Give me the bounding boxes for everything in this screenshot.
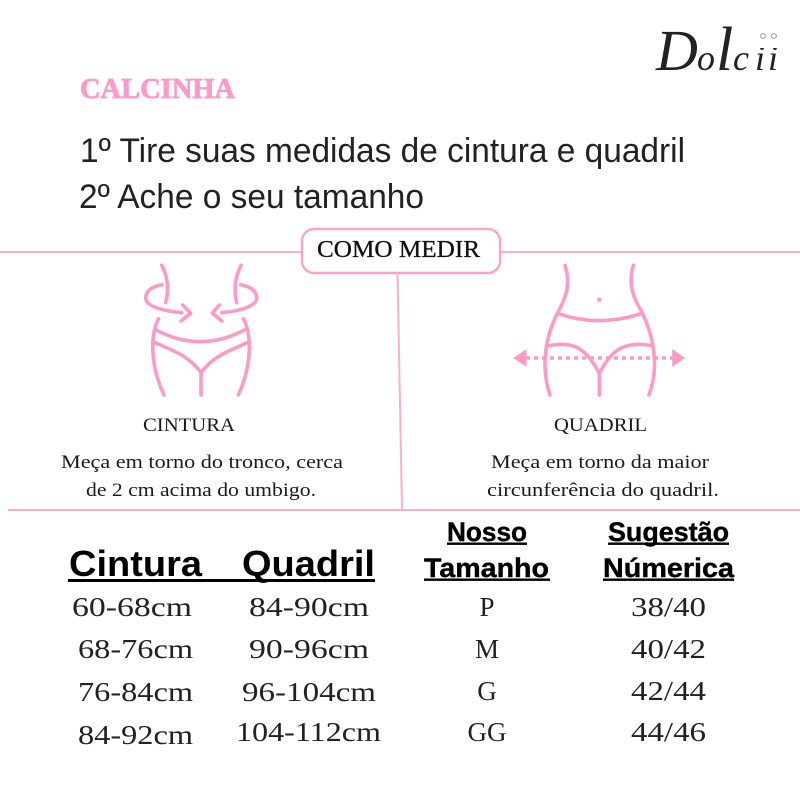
column: size values: G	[477, 676, 497, 706]
logo: Dolcii: D	[655, 18, 698, 83]
logo: Dolcii: o	[697, 38, 715, 78]
column: size values: M	[475, 634, 499, 664]
table header: Cintura and Quadril	[68, 543, 375, 584]
column: numeric suggestion values: 42/44	[631, 676, 707, 706]
table header: Cintura and Quadril: Cintura	[69, 543, 203, 584]
text block: waist instructions: de 2 cm acima do umbigo.	[86, 481, 316, 501]
label: CINTURA: CINTURA	[143, 415, 235, 436]
column: waist values: 60-68cm	[72, 592, 192, 622]
instruction step 1: 1º Tire suas medidas de cintura e quadril	[80, 132, 685, 170]
text block: waist instructions: Meça em torno do tronco, cerca	[61, 453, 343, 473]
column: size values	[468, 592, 506, 747]
label: QUADRIL: QUADRIL	[554, 415, 647, 436]
text block: waist instructions	[61, 453, 343, 501]
column: hip values	[236, 592, 381, 747]
table header: Sugestão Númerica: Sugestão	[608, 517, 729, 547]
column: numeric suggestion values: 40/42	[631, 634, 706, 664]
logo: Dolcii: c	[733, 38, 749, 78]
column: waist values: 68-76cm	[78, 634, 193, 664]
text block: hip instructions: Meça em torno da maior	[491, 453, 709, 473]
table header: Cintura and Quadril: Quadril	[242, 543, 375, 584]
column: waist values: 84-92cm	[78, 720, 193, 750]
column: waist values: 76-84cm	[78, 677, 193, 707]
icon: waist measurement	[146, 265, 257, 395]
table header: Nosso Tamanho	[424, 517, 550, 583]
table header: Sugestão Númerica: Númerica	[603, 553, 735, 583]
column: numeric suggestion values	[631, 592, 707, 747]
column: numeric suggestion values: 38/40	[631, 592, 706, 622]
logo: Dolcii: ii	[755, 38, 778, 78]
icon: hip measurement	[514, 265, 684, 395]
table header: Nosso Tamanho: Nosso	[447, 517, 527, 547]
text block: hip instructions: circunferência do quadril.	[487, 481, 719, 501]
table header: Nosso Tamanho: Tamanho	[424, 553, 549, 583]
column: hip values: 84-90cm	[249, 592, 369, 622]
column: size values: GG	[468, 717, 506, 747]
text block: hip instructions	[487, 453, 719, 501]
logo: Dolcii: l	[716, 16, 733, 84]
column: hip values: 96-104cm	[242, 677, 376, 707]
column: hip values: 90-96cm	[249, 634, 369, 664]
instruction step 2: 2º Ache o seu tamanho	[79, 178, 424, 216]
column: waist values	[72, 592, 193, 750]
column: hip values: 104-112cm	[236, 717, 381, 747]
title: CALCINHA: CALCINHA	[80, 74, 236, 105]
logo: Dolcii	[655, 16, 780, 84]
column: size values: P	[479, 592, 495, 622]
heading: COMO MEDIR	[302, 229, 500, 273]
column: numeric suggestion values: 44/46	[631, 717, 706, 747]
table header: Sugestão Númerica	[603, 517, 735, 583]
heading: COMO MEDIR: COMO MEDIR	[317, 237, 480, 263]
